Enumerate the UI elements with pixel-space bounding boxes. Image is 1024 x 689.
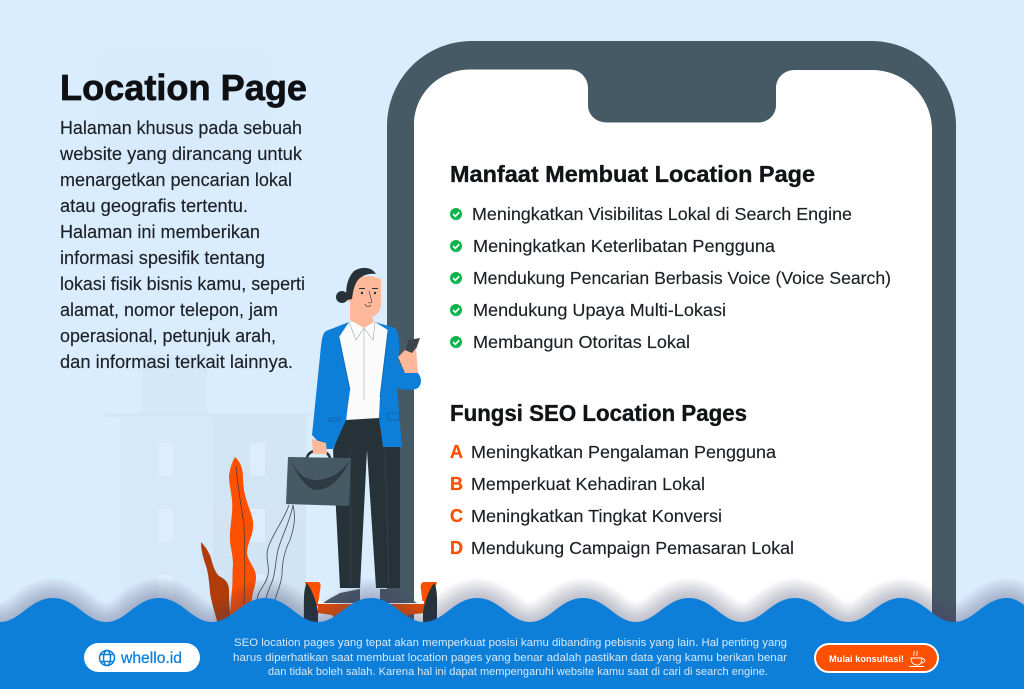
heading: benefits: Manfaat Membuat Location Page [450, 161, 815, 187]
placket line [363, 328, 365, 400]
hair [346, 268, 376, 300]
plant: outline line leaves [257, 505, 294, 603]
background building [98, 50, 311, 627]
function B: Memperkuat Kehadiran Lokal [471, 474, 705, 494]
consult button: Mulai konsultasi! [829, 654, 904, 665]
shoes [323, 589, 360, 603]
description text: informasi spesifik tentang [60, 248, 265, 268]
ear [344, 294, 352, 302]
description text: lokasi fisik bisnis kamu, seperti [60, 274, 305, 294]
functions list [450, 442, 794, 558]
description text: website yang dirancang untuk [59, 144, 303, 164]
hoverboard [304, 582, 437, 625]
website pill [84, 643, 200, 672]
jacket left [312, 322, 350, 449]
consult button [815, 644, 938, 672]
function C: C [450, 506, 463, 526]
right hand [398, 348, 418, 373]
description text: menargetkan pencarian lokal [60, 170, 292, 190]
left hand [312, 439, 327, 454]
function D: D [450, 538, 463, 558]
trousers [333, 415, 400, 588]
description text: alamat, nomor telepon, jam [60, 300, 278, 320]
footer text [233, 637, 787, 678]
function C: Meningkatkan Tingkat Konversi [471, 506, 722, 526]
briefcase handle [307, 450, 330, 458]
benefit 2: Meningkatkan Keterlibatan Pengguna [473, 236, 775, 256]
benefit 3: Mendukung Pencarian Berbasis Voice (Voice Search) [473, 268, 891, 288]
jacket right and sleeve [375, 322, 421, 447]
description text: Halaman ini memberikan [60, 222, 260, 242]
description text [59, 118, 305, 372]
description text: atau geografis tertentu. [60, 196, 248, 216]
function A: Meningkatkan Pengalaman Pengguna [471, 442, 776, 462]
character: business man [286, 268, 421, 603]
heading: functions: Fungsi SEO Location Pages [450, 400, 747, 426]
footer wave [0, 598, 1024, 689]
phone frame [387, 41, 956, 689]
icon: globe [100, 650, 114, 666]
description text: dan informasi terkait lainnya. [60, 352, 293, 372]
jacket seams and pockets [328, 330, 400, 421]
title: Location Page [60, 67, 307, 108]
benefit 5: Membangun Otoritas Lokal [473, 332, 690, 352]
benefit 4: Mendukung Upaya Multi-Lokasi [473, 300, 726, 320]
function B: B [450, 474, 463, 494]
function A: A [450, 442, 463, 462]
description text: Halaman khusus pada sebuah [60, 118, 302, 138]
footer text: SEO location pages yang tepat akan memperkuat posisi kamu dibanding pebisnis yang lain. Hal penting yang [234, 637, 787, 649]
shirt [339, 322, 388, 420]
benefit 1: Meningkatkan Visibilitas Lokal di Search Engine [472, 204, 852, 224]
icon: coffee cup [909, 651, 925, 666]
benefits list [450, 204, 891, 352]
phone in hand [405, 338, 420, 353]
trouser crease lines [350, 450, 389, 585]
plant: bright orange leaf [229, 457, 256, 622]
description text: operasional, petunjuk arah, [60, 326, 276, 346]
footer text: dan tidak boleh salah. Karena hal ini dapat mempengaruhi website kamu saat di cari di search engine. [268, 666, 768, 678]
collar [349, 322, 375, 340]
neck and face [350, 276, 381, 328]
function D: Mendukung Campaign Pemasaran Lokal [471, 538, 794, 558]
footer text: harus diperhatikan saat membuat location pages yang benar adalah pastikan data yang kamu berikan benar [233, 652, 787, 664]
face details [359, 288, 378, 306]
hair bun [336, 291, 348, 303]
plant: dark orange leaf [201, 542, 231, 625]
briefcase [286, 457, 351, 506]
website pill: whello.id [120, 650, 182, 667]
wave shadow [0, 598, 1024, 689]
